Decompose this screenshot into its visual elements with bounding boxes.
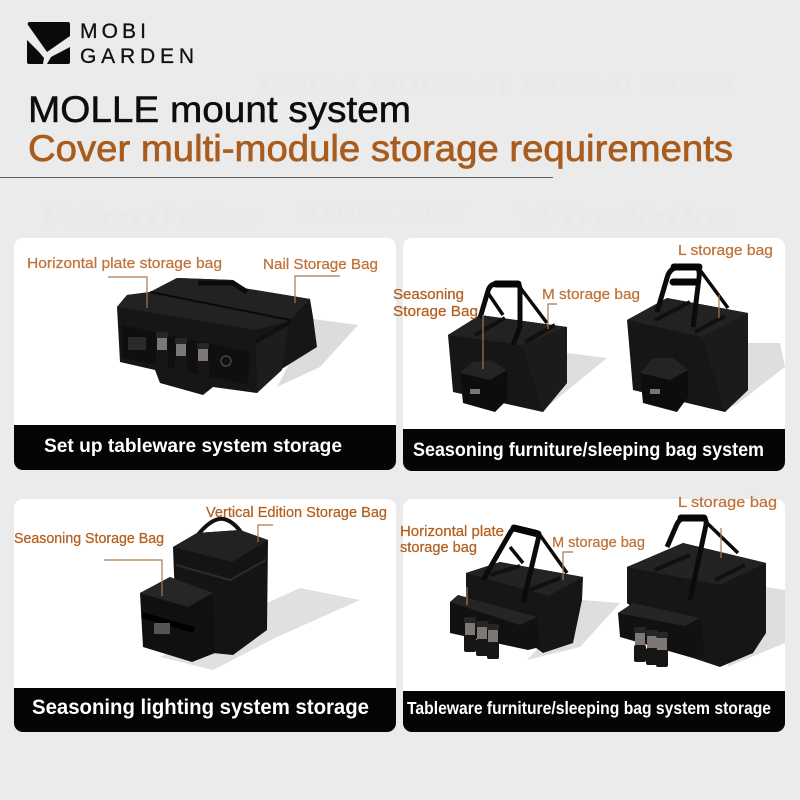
caption bar — [14, 688, 396, 732]
caption: Seasoning lighting system storage — [32, 696, 369, 719]
caption: Seasoning furniture/sleeping bag system — [413, 439, 764, 461]
callout: Horizontal plate storage bag: Horizontal plate storage bag — [27, 256, 222, 272]
callout: L storage bag: L storage bag — [678, 243, 773, 259]
callout: Seasoning Storage Bag: Storage Bag — [393, 304, 478, 320]
caption bar — [14, 425, 396, 470]
faint watermarks: China Outdoor Global Store — [260, 69, 735, 100]
callout: Horizontal plate storage bag: storage bag — [400, 540, 477, 556]
faint watermarks: Windhike — [40, 201, 258, 232]
bag: vertical edition storage — [173, 519, 268, 655]
icon: logo mark — [27, 22, 70, 64]
faint watermarks: 910927007 — [298, 195, 470, 226]
callout: Nail Storage Bag — [263, 257, 378, 303]
bag shadows — [540, 343, 785, 407]
callout: Vertical Edition Storage Bag: Vertical Edition Storage Bag — [206, 505, 387, 521]
logo wordmark — [80, 20, 194, 68]
caption: Set up tableware system storage — [44, 435, 342, 457]
bag shadow — [160, 588, 360, 670]
callout: Seasoning Storage Bag — [14, 531, 164, 596]
faint watermarks: Windhike — [516, 201, 734, 232]
title: MOLLE mount system — [28, 89, 411, 130]
callout: M storage bag: M storage bag — [552, 535, 645, 551]
logo wordmark: MOBI — [80, 20, 146, 43]
bag: M storage with seasoning bag — [448, 284, 567, 412]
callout: L storage bag: L storage bag — [678, 495, 777, 511]
caption bar — [403, 429, 785, 471]
callout: M storage bag — [552, 535, 645, 580]
bag shadows — [527, 587, 785, 667]
bag: L storage with plate bag — [618, 518, 766, 667]
panel: seasoning furniture and sleeping bag system — [393, 238, 785, 471]
caption bar — [403, 691, 785, 732]
panel: tableware system — [14, 238, 396, 470]
bag: horizontal plate and nail storage — [117, 278, 317, 395]
callout: L storage bag — [678, 495, 777, 558]
logo: Mobi Garden — [27, 20, 194, 68]
bag: seasoning storage — [140, 577, 215, 662]
callout: Nail Storage Bag: Nail Storage Bag — [263, 257, 378, 273]
callout: Vertical Edition Storage Bag — [206, 505, 387, 542]
callout: M storage bag — [542, 287, 640, 329]
callout: Horizontal plate storage bag: Horizontal plate — [400, 524, 504, 540]
bag: M storage with plate bag — [450, 528, 583, 659]
callout: Horizontal plate storage bag — [27, 256, 222, 308]
faint watermarks — [40, 69, 735, 232]
panel: tableware furniture and sleeping bag system — [400, 495, 785, 732]
callout: Seasoning Storage Bag: Seasoning Storage Bag — [14, 531, 164, 547]
callout: L storage bag — [678, 243, 773, 318]
callout: Seasoning Storage Bag: Seasoning — [393, 287, 464, 303]
subtitle: Cover multi-module storage requirements — [28, 128, 733, 169]
callout: Horizontal plate storage bag — [400, 524, 504, 605]
panel: seasoning lighting system — [14, 499, 396, 732]
callout: M storage bag: M storage bag — [542, 287, 640, 303]
logo wordmark: GARDEN — [80, 45, 194, 68]
callout: Seasoning Storage Bag — [393, 287, 483, 369]
bag shadow — [277, 319, 358, 387]
bag: L storage with seasoning bag — [627, 267, 748, 412]
